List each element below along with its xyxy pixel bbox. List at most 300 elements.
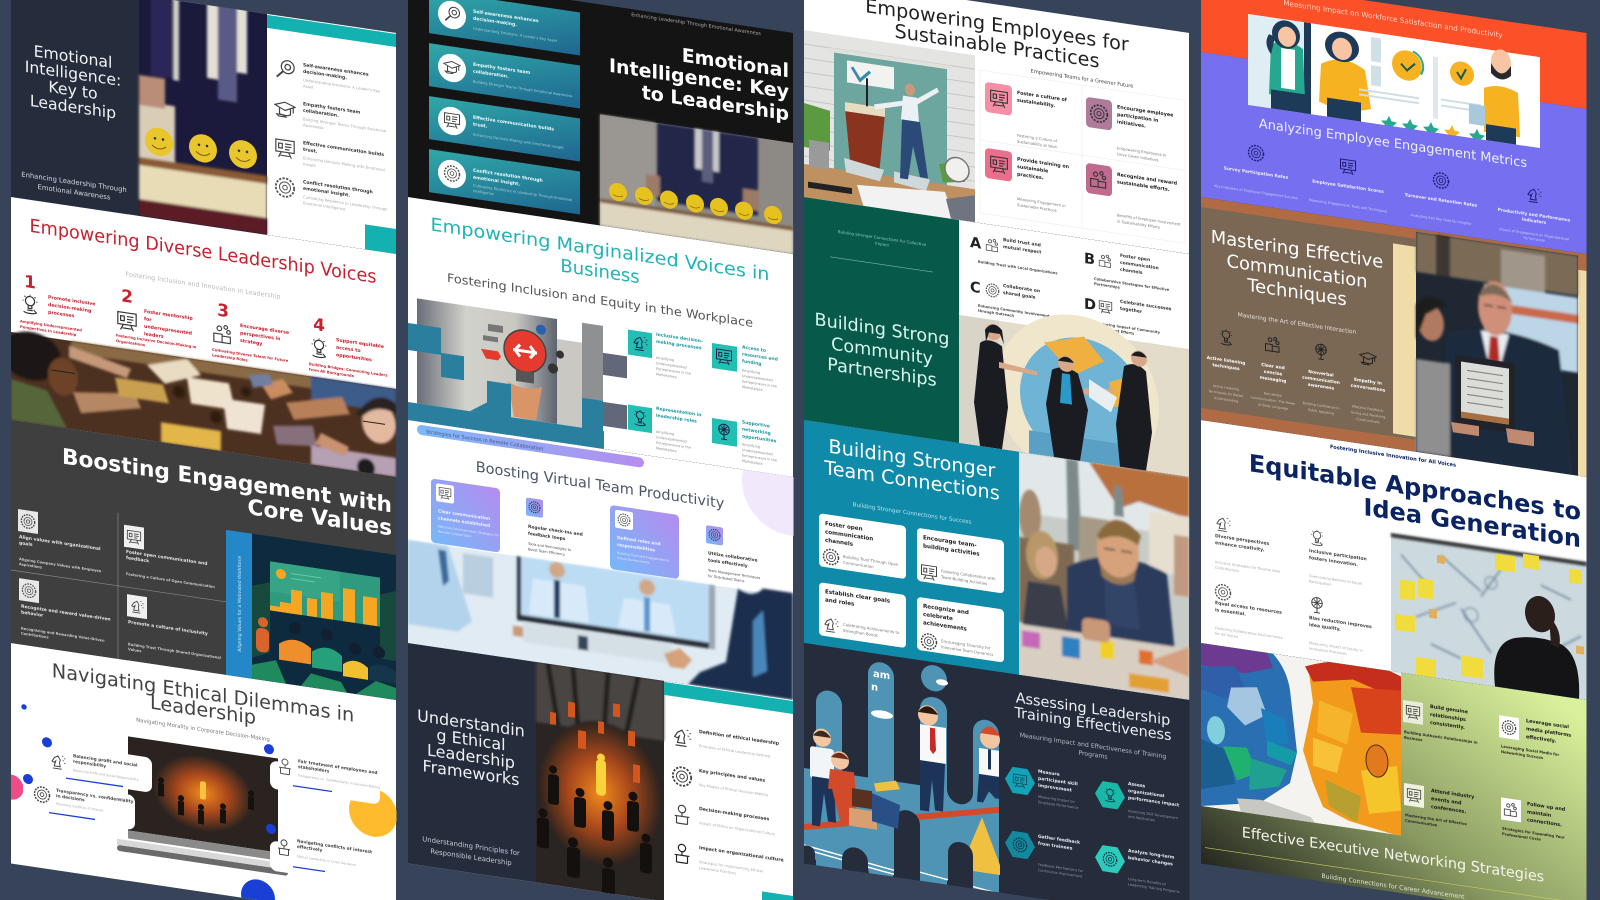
four teal icon points: funding (742, 358, 762, 367)
panel: Understanding Ethical Leadership Frameworks (408, 643, 793, 900)
subtitle: Building Stronger Connections for Success (853, 502, 971, 526)
four hexagon points: Gather feedback (1038, 835, 1080, 846)
four pink icon points: Provide training on (1017, 158, 1069, 170)
four metrics: Productivity and Performance (1498, 208, 1570, 224)
title: Navigating Ethical Dilemmas in (52, 659, 354, 727)
four hexagon points (1005, 763, 1180, 894)
four points: Inclusive Strategies for Diverse Idea (1215, 560, 1280, 574)
point: balancing profit: Balancing Profit and Social Responsibility (73, 768, 139, 782)
four numbered points (20, 271, 388, 383)
photo: employee with drink and measuring tape (804, 30, 975, 224)
four teal cards: emotional insight. (473, 175, 520, 188)
laptop with crowd photo (117, 735, 288, 876)
four techniques: conversations (1351, 383, 1386, 394)
four techniques: concise (1264, 369, 1282, 378)
four techniques: Effective Feedback: (1352, 404, 1384, 413)
subtitle: Enhancing Leadership Through (21, 171, 127, 194)
four points: Strategies for Expanding Your (1502, 827, 1565, 840)
panel: Boosting Engagement with Core Values: Core Values (248, 495, 392, 541)
four numbered points: Promote inclusive (48, 295, 95, 307)
panel: Building Stronger Team Connections (804, 420, 1189, 700)
four white cards: communication (825, 529, 873, 543)
four points: events and (1431, 796, 1462, 807)
four teal icon points: Amplifying (742, 442, 760, 449)
point: check-ins: Boost Team Efficiency (528, 547, 565, 557)
four teal icon points: Amplifying (656, 430, 674, 436)
four value items: behavior (21, 610, 44, 619)
four value items: Values (128, 647, 141, 653)
four techniques: Giving and Receiving (1351, 410, 1385, 419)
four teal icon points: Access to (742, 345, 766, 354)
four points: media platforms (1526, 726, 1571, 739)
four value items: Aspirations (19, 562, 42, 570)
subtitle: Enhancing Leadership Through Emotional Awareness (631, 12, 761, 37)
four pink icon points: sustainable efforts. (1117, 179, 1170, 193)
panel: Effective Executive Networking Strategies (1201, 639, 1587, 900)
four pink icon points: Encourage employee (1117, 105, 1173, 119)
title: Building Stronger (829, 435, 996, 482)
four techniques: communication (1302, 374, 1340, 386)
four points: idea quality. (1309, 622, 1341, 633)
blue sidebar (226, 530, 252, 679)
four lettered points: through Outreach (978, 309, 1015, 318)
four points: is essential. (1215, 607, 1246, 618)
teal corner block (762, 891, 793, 900)
four numbered points: Foster mentorship (144, 310, 193, 322)
four value items: Recognize and reward value-driven (21, 604, 111, 623)
illustration: team on a seesaw seen through arches: n (871, 682, 878, 694)
title: Intelligence: (25, 57, 121, 90)
subtitle: Understanding Principles for (422, 835, 520, 858)
list of four points: trust. (303, 147, 318, 155)
four white cards: Encouraging Diversity for (941, 638, 990, 651)
title: Partnerships (827, 355, 937, 391)
four teal cards: Conflict resolution through (473, 169, 543, 184)
four teal icon points: Representation in (656, 407, 701, 418)
four metrics: Impact of Engagement on Organizational (1499, 227, 1569, 241)
four points: for All Voices (1215, 632, 1238, 639)
panel: Empowering Diverse Leadership Voices (1, 196, 396, 481)
four pink icon points: initiatives. (1117, 119, 1146, 130)
four points: Contributions (1215, 566, 1239, 573)
point: transparency (34, 786, 134, 820)
four teal cards: decision-making. (473, 16, 517, 28)
photo: hands assembling puzzle (1, 328, 396, 481)
four points (1215, 515, 1372, 660)
photo: suit with smiley balls (139, 0, 267, 235)
four techniques: awareness (1308, 382, 1335, 392)
four teal icon points: Amplifying (656, 356, 674, 362)
four techniques: Active Listening (1213, 384, 1239, 392)
four techniques: Techniques for Better (1207, 389, 1244, 398)
list of four points: Empathy fosters team (303, 102, 360, 116)
title: Analyzing Employee Engagement Metrics (1259, 117, 1527, 171)
panel: Boosting Engagement with Core Values (11, 420, 396, 700)
four pink icon points: Sustainable Practices (1017, 203, 1057, 213)
list of four points (275, 58, 388, 218)
four teal cards: Empathy fosters team (473, 63, 530, 76)
four hexagon points: Measure (1038, 770, 1060, 778)
list of four points: Cultivating Resilience in Leadership Through (303, 194, 388, 212)
four numbered points: perspectives in (240, 330, 280, 342)
four techniques: Public Speaking (1308, 408, 1334, 416)
list of four points: Building Stronger Teams Through Emotional (303, 116, 386, 134)
four lettered points: Collaborative Strategies for Effective (1094, 277, 1169, 292)
point: collaborative tools: for Distributed Teams (708, 574, 745, 583)
teal band (664, 682, 793, 714)
four points: Communication (1405, 819, 1438, 828)
panel: Equitable Approaches to Idea Generation: Idea Generation (1363, 493, 1581, 553)
four white cards: Celebrating Achievements to (843, 622, 899, 635)
list of four points: Emotional Intelligence (303, 200, 346, 212)
four hexagon points: participant skill (1038, 776, 1078, 788)
four teal icon points (628, 328, 778, 468)
four metrics (1214, 139, 1570, 247)
four pink icon points: Benefits of Employee Involvement (1117, 213, 1181, 227)
four teal cards: collaboration. (473, 69, 509, 80)
four value items: Promote a culture of inclusivity (128, 619, 208, 637)
four points: Leveraging Social Media for (1501, 744, 1559, 757)
point: check-ins (526, 497, 583, 559)
four lettered points: D (1084, 296, 1096, 314)
four lettered points: A (970, 234, 982, 253)
four techniques: techniques (1212, 362, 1240, 372)
four lettered points: communication (1120, 260, 1159, 271)
four techniques: Communication: The Power (1250, 395, 1296, 406)
four techniques: Active listening (1207, 356, 1245, 367)
four teal icon points: Supportive (742, 420, 770, 430)
card: defined roles (610, 505, 679, 579)
four points: Leverage social (1526, 718, 1569, 730)
panel: Analyzing Employee Engagement Metrics (1201, 0, 1587, 254)
point: collaborative tools: tools effectively (708, 557, 748, 569)
four pink icon points: Drive Green Initiatives (1117, 152, 1159, 162)
four white cards: channels (825, 538, 854, 548)
four teal icon points: Marketplace (742, 385, 763, 392)
four pink icon points: practices. (1017, 172, 1044, 181)
image: lightbulb in hand with pixel blocks (408, 297, 627, 452)
subtitle: Empowering Teams for a Greener Future (1031, 69, 1133, 90)
four numbered points: Cultivating Diverse Talent for Future (212, 348, 288, 363)
point: conflicts of interest: Navigating conflicts of interest (297, 839, 372, 855)
panel: Assessing Leadership Training Effectiveness (800, 642, 1190, 900)
four pink icon points: Foster a culture of (1017, 91, 1067, 103)
four teal icon points: leadership roles (656, 413, 697, 425)
four numbered points: strategy (240, 338, 262, 347)
four teal icon points: Underrepresented (742, 448, 773, 456)
four pink icon points: sustainable (1017, 164, 1049, 175)
point: transparency: Resolving Conflicts of Interest (56, 802, 104, 813)
panel: Emotional Intelligence dark slide (column 2): to Leadership (642, 81, 789, 125)
list of four points: decision-making. (303, 69, 347, 81)
photo: woman at whiteboard with sticky notes (1391, 533, 1587, 700)
four lettered points: Collaborate on (1003, 284, 1040, 294)
four white cards: Recognize and (923, 604, 969, 616)
title: Empowering Marginalized Voices in (430, 214, 769, 285)
four numbered points: underrepresented (144, 324, 192, 337)
four teal cards: Cultivating Resilience in Leadership Through Emotional (473, 184, 572, 202)
title: Leadership (30, 91, 116, 123)
four points: Participation (1309, 580, 1331, 587)
illustration: employees and ratings (1248, 12, 1540, 153)
four hexagon points: behavior changes (1128, 855, 1173, 868)
four numbered points: 3 (217, 301, 229, 322)
four numbered points: 1 (24, 272, 36, 294)
four white cards: and roles (825, 597, 855, 608)
four white cards (819, 513, 1004, 663)
four lettered points: Measuring Impact of Community (1094, 321, 1160, 335)
four teal cards: Enhancing Decision-Making with Emotional Insight (473, 133, 564, 150)
four teal cards: Effective communication builds (473, 116, 554, 133)
four value items: Aligning Company Values with Employee (19, 557, 101, 573)
title: Emotional (34, 41, 112, 72)
four teal icon points: Entrepreneurs in the (656, 367, 691, 376)
four numbered points: Support equitable (336, 338, 384, 350)
four teal cards: Self-awareness enhances (473, 10, 539, 24)
four pink icon points: sustainability. (1017, 98, 1055, 109)
illustration: two puzzle-pattern heads (1201, 639, 1401, 837)
point: transparency: in decisions (56, 793, 85, 803)
list of four points: emotional insight. (303, 186, 350, 199)
subtitle: Responsible Leadership (430, 847, 512, 867)
callout cards (23, 754, 380, 873)
list of four points: Definition of ethical leadership (699, 729, 780, 747)
four points: Innovation Processes (1309, 647, 1347, 656)
four teal icon points: resources and (742, 351, 778, 363)
four points: relationships (1430, 712, 1466, 723)
four pink icon points: Recognize and reward (1117, 173, 1177, 187)
four pink icon points: Fostering a Culture of (1017, 134, 1057, 143)
four numbered points: from All Backgrounds (309, 368, 355, 378)
four points: Build genuine (1430, 704, 1468, 715)
four hexagon points: organizational (1128, 788, 1165, 799)
four teal icon points: Marketplace (656, 446, 677, 453)
title: Boosting Engagement with (62, 445, 392, 518)
list of four points: Effective communication builds (303, 141, 384, 158)
four value items: Recognizing and Rewarding Value-Driven (21, 626, 105, 643)
four numbered points: Encourage diverse (240, 324, 289, 336)
card: clear communication: channels established (438, 515, 490, 529)
four lettered points: Celebrate successes (1120, 300, 1171, 312)
illustration: team on a seesaw seen through arches: am (873, 669, 890, 682)
four hexagon points: improvement (1038, 783, 1073, 794)
four numbered points: decision-making (48, 302, 91, 314)
illustration: team on a seesaw seen through arches (800, 642, 1004, 900)
card: clear communication: Effective Communication Strategies for (438, 524, 499, 537)
four teal icon points: Underrepresented (656, 361, 687, 370)
list of four points: Enhancing Decision-Making with Emotional (303, 155, 385, 172)
four techniques (1207, 327, 1386, 425)
four techniques: Building Confidence in (1303, 401, 1339, 410)
photo: suit and row of smileys (600, 114, 793, 254)
four metrics: Survey Participation Rates (1224, 165, 1289, 181)
four teal icon points: Entrepreneurs in the (742, 453, 777, 463)
panel: Boosting Virtual Team Productivity (408, 383, 838, 707)
four points (1403, 700, 1571, 847)
list of four points: collaboration. (303, 108, 339, 119)
four pink icon points: participation in (1117, 112, 1159, 124)
list of four points: Principles of Ethical Leadership Defined (699, 744, 770, 759)
four points: Attend industry (1431, 788, 1474, 800)
four points: Measuring Impact of Equity in (1309, 641, 1363, 653)
four teal icon points: Marketplace (742, 459, 763, 466)
four numbered points: Building Bridges: Connecting Leaders (309, 362, 388, 378)
four numbered points: Leadership Roles (212, 353, 249, 363)
four numbered points: Fostering Inclusive Decision-Making in (116, 334, 196, 349)
point: balancing profit (51, 754, 138, 788)
four teal icon points: Amplifying (742, 368, 760, 375)
four hexagon points: Long-term Benefits of (1128, 877, 1166, 887)
four teal icon points: opportunities (742, 433, 777, 445)
four numbered points: 2 (121, 286, 133, 308)
four teal icon points: networking (742, 426, 771, 437)
four value items: Foster open communication and (126, 550, 207, 567)
four numbered points: processes (48, 309, 75, 319)
four metrics: Employee Satisfaction Scores (1312, 178, 1384, 195)
four points: Business (1404, 736, 1423, 742)
four points: effectively. (1526, 734, 1556, 745)
four teal icon points: Marketplace (656, 372, 677, 379)
four hexagon points: Assessing Skill Development (1128, 809, 1178, 820)
four white cards: Encourage team- (923, 535, 977, 549)
four points: Fostering Collaborative Environments (1215, 626, 1283, 640)
subtitle: Fostering Inclusion and Innovation in Leadership (126, 270, 280, 301)
list of four points: Understanding Emotions: A Leader's Key (303, 77, 380, 94)
four lettered points: Build trust and (1003, 238, 1041, 249)
four white cards: building activities (923, 543, 980, 558)
panel: Empowering Employees for Sustainable Practices (804, 0, 1189, 256)
four value items: Building Trust Through Shared Organizational (128, 642, 221, 660)
list of four points: Strategies for Implementing Ethical (699, 860, 763, 874)
four points: Diverse perspectives (1215, 534, 1269, 547)
four teal icon points: Entrepreneurs in the (656, 441, 691, 450)
title: Assessing Leadership (1016, 690, 1170, 729)
list of four points (673, 725, 784, 883)
caption pill (417, 424, 644, 468)
four white cards: Strengthen Bonds (843, 628, 878, 638)
panel: Building Strong Community Partnerships (804, 197, 1189, 496)
four teal cards: Intelligence (473, 189, 495, 196)
four hexagon points: Analyze long-term (1128, 849, 1174, 861)
four hexagon points: Assess (1128, 782, 1145, 789)
four white cards: celebrate (923, 612, 953, 622)
photo: crowd with glowing figure (536, 662, 664, 900)
list of four points: Impact of Ethics on Organizational Culture (699, 821, 776, 836)
point: collaborative tools (706, 525, 760, 586)
subtitle: Measuring Impact and Effectiveness of Training (1020, 732, 1166, 761)
teal corner block (365, 224, 396, 254)
four teal cards: trust. (473, 122, 488, 130)
list of four points: Awareness (303, 122, 323, 130)
four pink icon points: Sustainability at Work (1017, 140, 1058, 150)
four techniques: Clear and (1261, 363, 1285, 371)
four points: Equal access to resources (1215, 601, 1282, 616)
photo: video conference (408, 536, 793, 700)
title: Equitable Approaches to (1249, 449, 1581, 526)
four techniques: Empathy in (1354, 378, 1382, 387)
title: Frameworks (423, 756, 519, 789)
title: Understandin (417, 706, 525, 741)
four lettered points: Enhancing Community Involvement (978, 304, 1050, 318)
four techniques: Constructively (1356, 417, 1380, 424)
four lettered points: B (1084, 250, 1095, 269)
four pink icon points: in Sustainability Efforts (1117, 219, 1160, 230)
four hexagon points: Feedback Mechanisms for (1038, 863, 1083, 873)
four pink icon points (985, 82, 1181, 233)
four teal cards: Building Stronger Teams Through Emotional Awareness (473, 80, 572, 98)
point: transparency: Transparency vs. confidentiality (56, 789, 133, 805)
small heading: Fostering Inclusive Innovation for All Voices (1330, 444, 1456, 469)
four points: Professional Circle (1502, 832, 1541, 842)
four metrics: Turnover and Retention Rates (1405, 192, 1478, 209)
subtitle: Navigating Morality in Corporate Decision-Making (136, 718, 270, 743)
point: collaborative tools: Team Management Techniques (708, 568, 760, 580)
four metrics: Measuring Engagement: Tools and Techniques (1309, 198, 1387, 214)
panel: Emotional Intelligence title slide (column 1) (11, 0, 396, 254)
title: Mastering Effective (1211, 227, 1383, 273)
panel: Equitable Approaches to Idea Generation (1201, 420, 1587, 700)
title: Empowering Diverse Leadership Voices (30, 216, 377, 288)
four points: connections. (1527, 817, 1562, 828)
four value items: Fostering a Culture of Open Communication (126, 572, 215, 589)
point: fair treatment: stakeholders (298, 764, 330, 775)
four points: Bias reduction improves (1309, 616, 1372, 630)
point: check-ins: Regular check-ins and (528, 525, 583, 538)
four white cards: Communication (843, 560, 874, 569)
title: Effective Executive Networking Strategies (1242, 825, 1544, 886)
title: Building Strong (815, 310, 949, 350)
title: Leadership (427, 740, 515, 772)
subtitle: Fostering Inclusion and Equity in the Workplace (447, 271, 753, 330)
four value items: goals (19, 540, 33, 548)
teal band (267, 15, 396, 47)
card: clear communication (431, 478, 500, 553)
panel: Emotional Intelligence dark slide (column 2) (408, 0, 793, 254)
vertical caption: Aligning Values for a Motivated Workforce (237, 555, 243, 652)
point: conflicts of interest (278, 839, 372, 872)
photo: three people and globe (959, 298, 1189, 496)
card: defined roles: Building Trust and Engagement in (617, 551, 669, 563)
four techniques: Nonverbal (1308, 370, 1334, 379)
list of four points: Key Models of Ethical Decision-Making (699, 783, 768, 797)
small subtitle: Impact (875, 241, 889, 248)
four metrics: Key Indicators of Employee Engagement Success (1214, 184, 1298, 200)
point: balancing profit: Balancing profit and social (73, 754, 137, 769)
four white cards: achievements (923, 620, 967, 633)
four points: Follow up and (1527, 801, 1565, 813)
four value items: feedback (126, 555, 150, 565)
four white cards: Fostering Collaboration with (941, 568, 996, 581)
panel: Empowering Marginalized Voices (408, 197, 793, 477)
list of four points: Asset (303, 83, 314, 90)
four metrics: Analyzing Exit Key Data for Insights (1411, 213, 1471, 226)
four teal cards: Understanding Emotions: A Leader's Key Asset (473, 27, 558, 43)
photo: team working with blocks (1019, 452, 1189, 700)
panel: Empowering Marginalized Voices: Business (560, 256, 640, 288)
blue pin markers (23, 737, 276, 834)
four value items: Align values with organizational (19, 535, 101, 552)
four points: Building Authentic Relationships in (1404, 730, 1478, 745)
four hexagon points: performance impact (1128, 795, 1180, 809)
four numbered points: Amplifying Underrepresented (20, 319, 82, 332)
four numbered points: for (144, 316, 152, 323)
panel: Navigating Ethical Dilemmas (0, 641, 397, 900)
list of four points: Insight (303, 161, 316, 168)
four points: fosters innovation. (1309, 555, 1358, 568)
four lettered points: Partnerships (1094, 282, 1120, 290)
illustration: team watching chart (252, 534, 396, 700)
panel: Empowering Employees for Sustainable Practices: Sustainable Practices (895, 19, 1099, 73)
